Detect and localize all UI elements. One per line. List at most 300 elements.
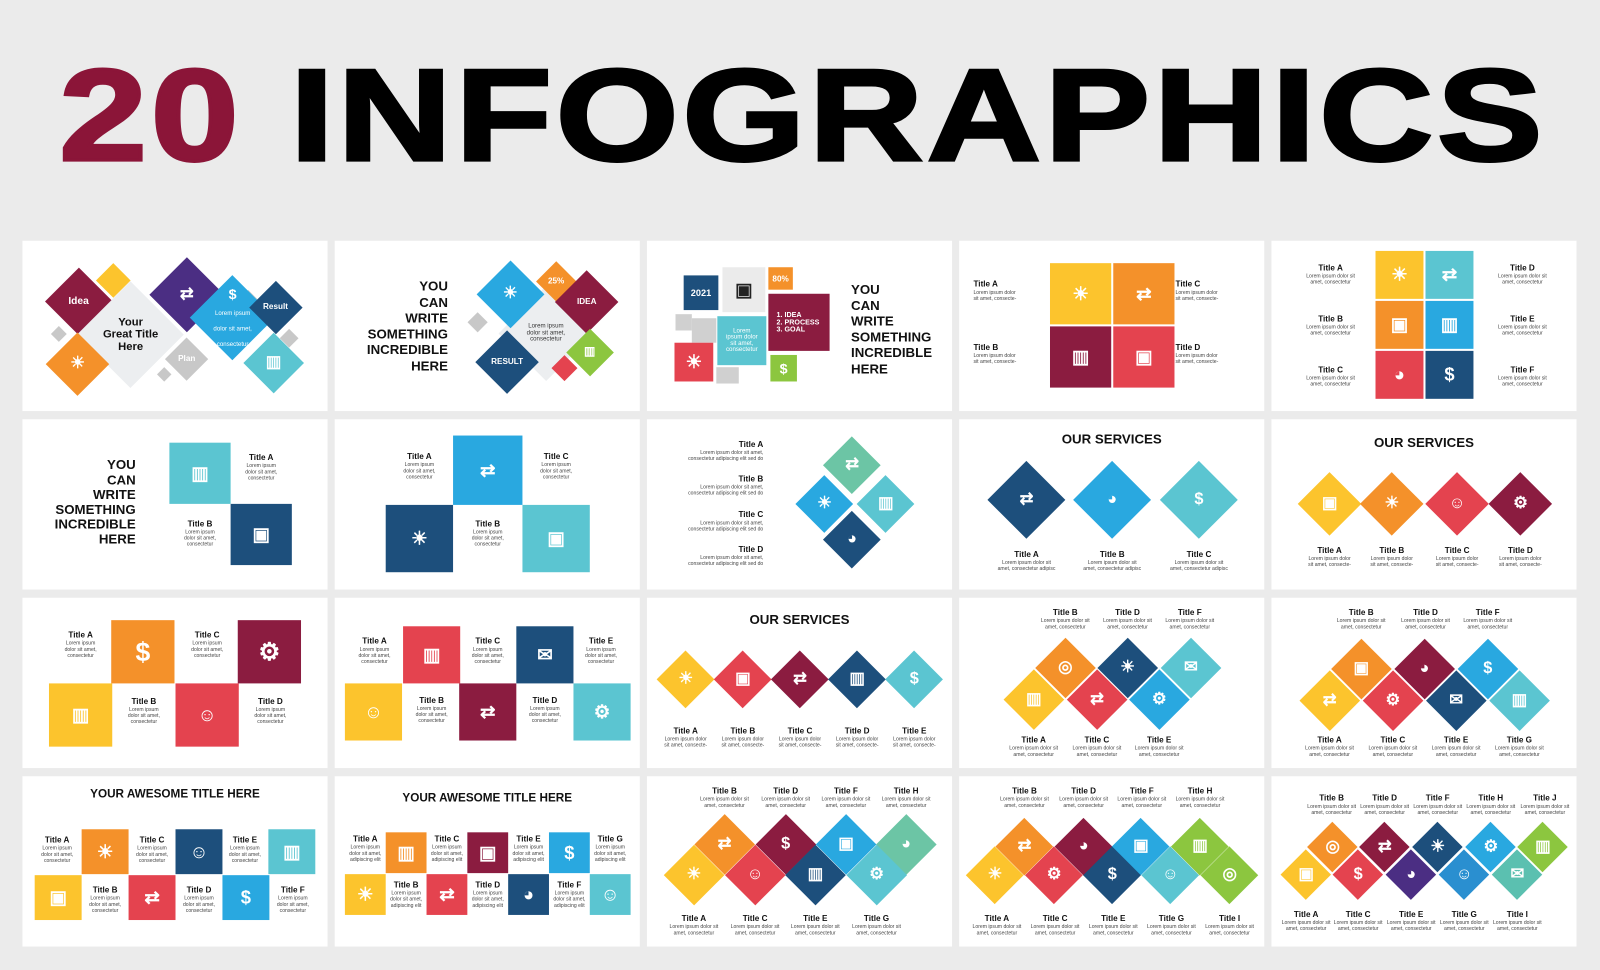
panel 16: awesome title 6 squares: consectetur (92, 908, 118, 914)
panel 4: 2x2 squares: Title A (973, 279, 998, 289)
panel 20: zigzag 10 diamonds: Title G (1452, 910, 1477, 919)
panel 16: awesome title 6 squares: Title E (233, 835, 257, 845)
panel 16: awesome title 6 squares: dolor sit amet, (136, 852, 168, 858)
panel 19: zigzag 9 diamonds: amet, consectetur (1122, 803, 1162, 809)
panel 14: zigzag 6 diamonds: ⚙ (1152, 691, 1166, 708)
panel 3: squares mosaic: ☀ (686, 351, 702, 372)
panel 16: awesome title 6 squares: dolor sit amet, (41, 852, 73, 858)
panel 20: zigzag 10 diamonds: Lorem ipsum dolor sit (1360, 803, 1409, 809)
panel 20: zigzag 10 diamonds: amet, consectetur (1497, 926, 1538, 932)
panel 13: our services 5: Lorem ipsum dolor (665, 736, 707, 742)
panel 12: 5 squares staggered: Lorem ipsum (530, 705, 560, 712)
panel 4: 2x2 squares: ▥ (1072, 346, 1089, 367)
panel 6: text with two squares: Title A (249, 453, 273, 462)
panel 16: awesome title 6 squares: $ (241, 887, 251, 907)
panel 19: zigzag 9 diamonds: Title G (1159, 914, 1184, 923)
panel 8: list with 4 diamonds: consectetur adipiscing elit sed do (688, 490, 763, 497)
panel 13: our services 5: ▣ (735, 670, 751, 688)
panel 20: zigzag 10 diamonds: Lorem ipsum dolor sit (1413, 803, 1462, 809)
panel 1: great title diamonds: ▥ (266, 354, 281, 371)
panel 13: our services 5: sit amet, consecte- (721, 742, 764, 749)
panel 14: zigzag 6 diamonds: Title F (1178, 608, 1202, 617)
panel 17: awesome title 7 squares: Title D (475, 880, 500, 889)
panel 18: zigzag 8 diamonds: ☀ (687, 866, 701, 884)
panel 17: awesome title 7 squares: Lorem ipsum (595, 844, 625, 850)
panel 8: list with 4 diamonds: consectetur adipiscing elit sed do (688, 456, 763, 462)
panel 19: zigzag 9 diamonds: ⇄ (1018, 838, 1031, 855)
panel 16: awesome title 6 squares: Title B (93, 885, 118, 895)
panel 16: awesome title 6 squares: Lorem ipsum (230, 845, 260, 851)
panel 15: zigzag 7 diamonds: amet, consectetur (1405, 624, 1446, 630)
panel 13: our services 5: Title C (788, 726, 812, 735)
panel 9: our services 3: amet, consectetur adipisc (998, 566, 1055, 572)
panel 19: zigzag 9 diamonds: amet, consectetur (1035, 930, 1075, 936)
panel 19: zigzag 9 diamonds: ◎ (1222, 866, 1237, 884)
panel 17: awesome title 7 squares: dolor sit amet, (594, 851, 626, 857)
panel 3: squares mosaic: 2021 (691, 288, 711, 298)
panel 15: zigzag 7 diamonds: amet, consectetur (1309, 752, 1350, 758)
panel 20: zigzag 10 diamonds: Lorem ipsum dolor sit (1466, 803, 1515, 809)
panel 17: awesome title 7 squares: adipiscing elit (432, 857, 462, 863)
panel 10: our services 4: ☺ (1449, 495, 1465, 512)
panel 11: 4 squares staggered: Lorem ipsum (66, 640, 95, 646)
panel 19: zigzag 9 diamonds: Title A (985, 914, 1009, 923)
panel 8: list with 4 diamonds: consectetur adipiscing elit sed do (688, 561, 763, 567)
panel 1: great title diamonds (22, 241, 328, 411)
panel 8: list with 4 diamonds: Title A (739, 440, 763, 449)
panel 18: zigzag 8 diamonds: amet, consectetur (735, 930, 775, 936)
panel 19: zigzag 9 diamonds: ⚙ (1047, 866, 1061, 884)
panel 11: 4 squares staggered: Lorem ipsum (129, 706, 159, 713)
panel 7: three squares: dolor sit amet, (540, 468, 572, 474)
panel 12: 5 squares staggered: Lorem ipsum (586, 646, 616, 652)
panel 7: three squares: Lorem ipsum (473, 529, 502, 535)
panel 3: squares mosaic: SOMETHING (851, 329, 931, 344)
panel 16: awesome title 6 squares: ▣ (49, 887, 67, 907)
panel 15: zigzag 7 diamonds: ✉ (1449, 692, 1463, 709)
panel 16: awesome title 6 squares (22, 776, 328, 947)
panel 4: 2x2 squares: ▣ (1135, 346, 1153, 367)
panel 5: 2x3 squares: ▥ (1441, 314, 1458, 335)
panel 1: great title diamonds: dolor sit amet, (213, 326, 252, 333)
panel 18: zigzag 8 diamonds: ⇄ (718, 836, 731, 853)
panel 16: awesome title 6 squares: consectetur (186, 908, 212, 914)
panel 14: zigzag 6 diamonds: ◎ (1058, 659, 1072, 676)
panel 8: list with 4 diamonds (647, 419, 952, 590)
panel 9: our services 3: Title B (1100, 550, 1125, 559)
panel 7: three squares: Title A (407, 452, 432, 461)
panel 11: 4 squares staggered: Title C (195, 630, 220, 640)
panel 17: awesome title 7 squares (335, 776, 640, 947)
panel 13: our services 5: sit amet, consecte- (893, 742, 936, 749)
panel 5: 2x3 squares: amet, consectetur (1310, 381, 1351, 387)
panel 7: three squares: Title C (544, 452, 569, 461)
panel 12: 5 squares staggered: Lorem ipsum (360, 646, 389, 652)
panel 20: zigzag 10 diamonds: amet, consectetur (1311, 810, 1352, 816)
panel 3: squares mosaic: ipsum dolor (726, 335, 758, 341)
panel 8: list with 4 diamonds: ☀ (817, 495, 832, 512)
panel 6: text with two squares: dolor sit amet, (245, 469, 277, 475)
panel 5: 2x3 squares: Lorem ipsum dolor sit (1498, 375, 1547, 381)
panel 16: awesome title 6 squares: consectetur (44, 858, 70, 864)
panel 20: zigzag 10 diamonds: Title A (1294, 910, 1318, 919)
panel 18: zigzag 8 diamonds: ▣ (838, 836, 854, 853)
panel 19: zigzag 9 diamonds: ▥ (1192, 838, 1208, 855)
title: 20 INFOGRAPHICS (59, 43, 1546, 189)
panel 19: zigzag 9 diamonds: ▣ (1133, 838, 1149, 855)
panel 17: awesome title 7 squares: Title E (516, 834, 541, 844)
panel 7: three squares: Title B (475, 519, 500, 528)
panel 19: zigzag 9 diamonds: Title B (1012, 786, 1037, 796)
panel 6: text with two squares: Lorem ipsum (185, 529, 215, 535)
panel 13: our services 5: Title B (730, 726, 755, 735)
panel 18: zigzag 8 diamonds: amet, consectetur (856, 930, 897, 936)
panel 13: our services 5: sit amet, consecte- (664, 742, 707, 749)
panel 20: zigzag 10 diamonds: amet, consectetur (1444, 926, 1485, 932)
panel 2: you can write diamonds: HERE (411, 358, 448, 373)
panel 16: awesome title 6 squares: Title D (187, 885, 211, 895)
panel 19: zigzag 9 diamonds: Lorem ipsum dolor sit (1059, 796, 1108, 802)
panel 8: list with 4 diamonds: Title B (738, 474, 763, 483)
panel 6: text with two squares: WRITE (93, 487, 136, 502)
panel 18: zigzag 8 diamonds: Title A (682, 914, 706, 923)
panel 4: 2x2 squares: Lorem ipsum dolor (973, 353, 1016, 359)
panel 11: 4 squares staggered: dolor sit amet, (254, 713, 286, 719)
panel 10: our services 4: sit amet, consecte- (1370, 562, 1413, 568)
panel 18: zigzag 8 diamonds: ⚙ (869, 866, 884, 884)
panel 5: 2x3 squares: Title C (1318, 365, 1343, 374)
panel 14: zigzag 6 diamonds: Lorem ipsum dolor sit (1165, 618, 1214, 624)
panel 16: awesome title 6 squares: consectetur (280, 908, 306, 914)
panel 16: awesome title 6 squares: Title F (281, 885, 305, 895)
panel 8: list with 4 diamonds: consectetur adipiscing elit sed do (688, 526, 763, 532)
panel 13: our services 5: Title A (673, 726, 698, 735)
panel 20: zigzag 10 diamonds: $ (1354, 866, 1363, 884)
panel 20: zigzag 10 diamonds: amet, consectetur (1286, 926, 1326, 932)
panel 18: zigzag 8 diamonds: amet, consectetur (886, 803, 926, 809)
panel 17: awesome title 7 squares: ☺ (601, 884, 620, 904)
panel 17: awesome title 7 squares: dolor sit amet, (513, 851, 545, 857)
panel 18: zigzag 8 diamonds: Lorem ipsum dolor sit (822, 796, 870, 802)
panel 4: 2x2 squares: sit amet, consecte- (1176, 296, 1218, 302)
panel 20: zigzag 10 diamonds: amet, consectetur (1338, 926, 1378, 932)
panel 11: 4 squares staggered: ▥ (72, 704, 89, 725)
panel 11: 4 squares staggered (22, 598, 328, 768)
panel 17: awesome title 7 squares: dolor sit amet, (349, 851, 381, 857)
panel 4: 2x2 squares: sit amet, consecte- (973, 359, 1016, 365)
panel 20: zigzag 10 diamonds: Lorem ipsum dolor sit (1387, 920, 1436, 926)
panel 10: our services 4: Lorem ipsum dolor (1371, 555, 1413, 562)
panel 18: zigzag 8 diamonds: Lorem ipsum dolor sit (791, 924, 840, 930)
panel 16: awesome title 6 squares: YOUR AWESOME TITLE HERE (90, 788, 260, 801)
panel 6: text with two squares (22, 419, 328, 590)
panel 3: squares mosaic: 2. PROCESS (777, 319, 819, 326)
panel 2: you can write diamonds: ▥ (584, 344, 596, 358)
panel 5: 2x3 squares: Title E (1510, 314, 1535, 323)
panel 17: awesome title 7 squares: Lorem ipsum (351, 844, 380, 850)
panel 1: great title diamonds: Plan (178, 354, 195, 363)
panel 7: three squares: consectetur (475, 542, 501, 548)
panel 13: our services 5: ▥ (849, 670, 865, 688)
panel 10: our services 4: ☀ (1385, 495, 1399, 512)
panel 6: text with two squares: consectetur (248, 475, 274, 482)
panel 14: zigzag 6 diamonds: Lorem ipsum dolor sit (1135, 745, 1184, 751)
panel 13: our services 5: Lorem ipsum dolor (722, 736, 764, 742)
panel 2: you can write diamonds: Lorem ipsum (528, 323, 564, 330)
panel 17: awesome title 7 squares: Title F (557, 880, 581, 889)
panel 7: three squares: Lorem ipsum (405, 462, 434, 468)
panel 17: awesome title 7 squares: dolor sit amet, (390, 896, 422, 903)
panel 16: awesome title 6 squares: Title C (140, 835, 164, 845)
panel 14: zigzag 6 diamonds: amet, consectetur (1170, 624, 1210, 630)
panel 2: you can write diamonds: 25% (548, 276, 564, 285)
panel 7: three squares (335, 419, 640, 590)
panel 5: 2x3 squares: ⇄ (1442, 264, 1457, 285)
panel 8: list with 4 diamonds: Lorem ipsum dolor sit amet, (700, 554, 763, 561)
panel 20: zigzag 10 diamonds: Title H (1478, 794, 1503, 803)
panel 12: 5 squares staggered: ✉ (537, 644, 553, 665)
panel 3: squares mosaic (647, 241, 952, 411)
panel 12: 5 squares staggered: dolor sit amet, (585, 653, 617, 659)
panel 19: zigzag 9 diamonds: Lorem ipsum dolor sit (1031, 924, 1079, 930)
panel 16: awesome title 6 squares: Title A (45, 835, 69, 845)
panel 3: squares mosaic: INCREDIBLE (851, 345, 932, 360)
panel 20: zigzag 10 diamonds: ▣ (1298, 866, 1314, 884)
panel 3: squares mosaic: ▣ (735, 279, 753, 299)
panel 20: zigzag 10 diamonds: ▥ (1535, 839, 1551, 856)
panel 12: 5 squares staggered: Title B (419, 696, 444, 705)
panel 17: awesome title 7 squares: ▥ (397, 842, 415, 862)
panel 14: zigzag 6 diamonds: ☀ (1120, 659, 1135, 676)
panel 5: 2x3 squares: ☀ (1391, 264, 1408, 285)
panel 17: awesome title 7 squares: Lorem ipsum (473, 890, 502, 896)
panel 10: our services 4: Title C (1445, 546, 1470, 555)
panel 8: list with 4 diamonds: Lorem ipsum dolor sit amet, (700, 520, 763, 526)
panel 18: zigzag 8 diamonds: Title B (712, 786, 737, 796)
panel 11: 4 squares staggered: dolor sit amet, (191, 647, 223, 653)
panel 6: text with two squares: consectetur (187, 542, 213, 548)
panel 5: 2x3 squares: Title D (1510, 263, 1535, 272)
panel 4: 2x2 squares (959, 241, 1264, 411)
panel 1: great title diamonds: Here (118, 341, 143, 353)
panel 15: zigzag 7 diamonds: Title G (1507, 735, 1532, 745)
panel 3: squares mosaic: 1. IDEA (777, 312, 802, 319)
panel 20: zigzag 10 diamonds: ◕ (1406, 866, 1416, 884)
panel 3: squares mosaic: consectetur (726, 347, 758, 353)
panel 13: our services 5 (647, 598, 952, 768)
panel 17: awesome title 7 squares: adipiscing elit (554, 903, 585, 909)
panel 18: zigzag 8 diamonds: amet, consectetur (674, 930, 714, 936)
panel 15: zigzag 7 diamonds: Lorem ipsum dolor sit (1432, 745, 1480, 751)
panel 13: our services 5: Lorem ipsum dolor (836, 736, 878, 742)
panel 15: zigzag 7 diamonds: ⇄ (1323, 692, 1336, 709)
panel 16: awesome title 6 squares: consectetur (139, 858, 165, 864)
panel 6: text with two squares: CAN (107, 472, 136, 487)
panel 10: our services 4: ▣ (1322, 495, 1337, 512)
panel 12: 5 squares staggered: ☺ (364, 701, 383, 722)
panel 3: squares mosaic: $ (780, 360, 788, 376)
panel 19: zigzag 9 diamonds: Lorem ipsum dolor sit (1176, 796, 1224, 802)
panel 20: zigzag 10 diamonds: Lorem ipsum dolor sit (1493, 920, 1542, 926)
panel 15: zigzag 7 diamonds: Title B (1349, 608, 1374, 617)
panel 14: zigzag 6 diamonds: Title D (1115, 608, 1140, 617)
panel 17: awesome title 7 squares: adipiscing elit (595, 857, 626, 863)
panel 11: 4 squares staggered: dolor sit amet, (65, 647, 97, 653)
panel 15: zigzag 7 diamonds: ⚙ (1386, 692, 1400, 709)
panel 7: three squares: ⇄ (480, 460, 495, 480)
panel 20: zigzag 10 diamonds: Lorem ipsum dolor sit (1520, 803, 1569, 809)
panel 14: zigzag 6 diamonds: ✉ (1184, 659, 1198, 676)
panel 18: zigzag 8 diamonds (647, 776, 952, 947)
panel 17: awesome title 7 squares: Title B (394, 880, 419, 889)
panel 14: zigzag 6 diamonds: Lorem ipsum dolor sit (1009, 745, 1058, 751)
panel 16: awesome title 6 squares: dolor sit amet, (89, 902, 121, 908)
panel 18: zigzag 8 diamonds: Lorem ipsum dolor sit (669, 924, 718, 930)
panel 17: awesome title 7 squares: ⇄ (439, 884, 455, 904)
panel 12: 5 squares staggered: Title A (362, 636, 387, 646)
panel 3: squares mosaic: WRITE (851, 313, 894, 328)
panel 1: great title diamonds: Idea (68, 295, 89, 307)
panel 15: zigzag 7 diamonds: amet, consectetur (1467, 624, 1508, 630)
panel 15: zigzag 7 diamonds: ▣ (1353, 660, 1369, 677)
panel 9: our services 3: ⇄ (1020, 491, 1033, 508)
panel 17: awesome title 7 squares: Title A (353, 834, 378, 844)
panel 12: 5 squares staggered: Title E (589, 636, 613, 646)
panel 14: zigzag 6 diamonds: amet, consectetur (1107, 624, 1148, 630)
panel 12: 5 squares staggered: Title D (532, 696, 557, 705)
panel 19: zigzag 9 diamonds: amet, consectetur (1093, 930, 1134, 936)
panel 9: our services 3: ◕ (1107, 491, 1117, 508)
panel 14: zigzag 6 diamonds: Title C (1085, 735, 1109, 745)
panel 2: you can write diamonds: RESULT (491, 357, 523, 366)
panel 1: great title diamonds: Result (263, 302, 288, 311)
panel 19: zigzag 9 diamonds: Lorem ipsum dolor sit (1117, 796, 1166, 802)
panel 12: 5 squares staggered: Lorem ipsum (473, 646, 502, 652)
panel 8: list with 4 diamonds: Lorem ipsum dolor sit amet, (700, 449, 763, 456)
panel 2: you can write diamonds: YOU (419, 278, 448, 294)
panel 16: awesome title 6 squares: consectetur (232, 858, 258, 864)
panel 1: great title diamonds: Your (118, 316, 143, 328)
panel 8: list with 4 diamonds: ⇄ (845, 456, 859, 473)
panel 14: zigzag 6 diamonds: Lorem ipsum dolor sit (1103, 618, 1152, 624)
panel 16: awesome title 6 squares: Lorem ipsum (42, 845, 72, 851)
panel 7: three squares: dolor sit amet, (403, 468, 435, 474)
panel 8: list with 4 diamonds: Lorem ipsum dolor sit amet, (700, 484, 763, 490)
panel 16: awesome title 6 squares: dolor sit amet, (229, 852, 261, 858)
panel 17: awesome title 7 squares: Lorem ipsum (514, 844, 543, 850)
panel 17: awesome title 7 squares: Lorem ipsum (432, 844, 462, 850)
panel 18: zigzag 8 diamonds: Lorem ipsum dolor sit (852, 924, 901, 930)
panel 15: zigzag 7 diamonds: amet, consectetur (1436, 752, 1476, 758)
panel 9: our services 3: Title A (1014, 550, 1039, 559)
panel 19: zigzag 9 diamonds: amet, consectetur (977, 930, 1017, 936)
panel 1: great title diamonds: ☀ (70, 355, 85, 373)
panel 11: 4 squares staggered: dolor sit amet, (128, 713, 160, 719)
panel 17: awesome title 7 squares: YOUR AWESOME TITLE HERE (402, 793, 572, 805)
panel 19: zigzag 9 diamonds: ☀ (988, 866, 1002, 884)
panel 15: zigzag 7 diamonds: ▥ (1512, 692, 1527, 709)
panel 9: our services 3: amet, consectetur adipisc (1083, 566, 1141, 572)
panel 19: zigzag 9 diamonds: Title D (1071, 786, 1096, 796)
panel 11: 4 squares staggered: consectetur (131, 719, 157, 725)
panel 18: zigzag 8 diamonds: Lorem ipsum dolor sit (882, 796, 930, 802)
panel 14: zigzag 6 diamonds: ▥ (1026, 691, 1041, 708)
panel 18: zigzag 8 diamonds: amet, consectetur (826, 803, 866, 809)
panel 14: zigzag 6 diamonds: Title A (1021, 735, 1046, 745)
panel 5: 2x3 squares: $ (1444, 364, 1455, 385)
panel 19: zigzag 9 diamonds: Lorem ipsum dolor sit (1000, 796, 1049, 802)
panel 19: zigzag 9 diamonds: Title F (1130, 786, 1154, 796)
panel 20: zigzag 10 diamonds: Lorem ipsum dolor sit (1440, 920, 1489, 926)
panel 12: 5 squares staggered: dolor sit amet, (472, 653, 504, 659)
panel 13: our services 5: sit amet, consecte- (836, 742, 879, 749)
panel 5: 2x3 squares: amet, consectetur (1502, 330, 1543, 336)
panel 9: our services 3: OUR SERVICES (1062, 431, 1162, 447)
panel 4: 2x2 squares: sit amet, consecte- (973, 296, 1016, 302)
panel 15: zigzag 7 diamonds: Lorem ipsum dolor sit (1463, 618, 1512, 624)
panel 15: zigzag 7 diamonds: Title C (1380, 735, 1405, 745)
panel 14: zigzag 6 diamonds: amet, consectetur (1013, 752, 1054, 758)
panel 13: our services 5: Title E (902, 726, 926, 735)
panel 20: zigzag 10 diamonds: Title D (1372, 794, 1397, 803)
panel 2: you can write diamonds: dolor sit amet, (527, 330, 565, 336)
panel 18: zigzag 8 diamonds: Title G (864, 914, 889, 923)
panel 16: awesome title 6 squares: ☀ (97, 841, 113, 861)
panel 4: 2x2 squares: Title C (1176, 279, 1200, 289)
panel 12: 5 squares staggered: dolor sit amet, (358, 653, 391, 659)
panel 5: 2x3 squares: Lorem ipsum dolor sit (1306, 273, 1355, 279)
panel 8: list with 4 diamonds: ▥ (878, 495, 893, 512)
panel 19: zigzag 9 diamonds: amet, consectetur (1063, 803, 1104, 809)
panel 18: zigzag 8 diamonds: ▥ (808, 866, 823, 884)
panel 4: 2x2 squares: Lorem ipsum dolor (1176, 353, 1218, 359)
panel 3: squares mosaic: Lorem (733, 328, 751, 335)
panel 4: 2x2 squares: Lorem ipsum dolor (1176, 289, 1218, 295)
panel 8: list with 4 diamonds: Title C (738, 510, 763, 519)
panel 18: zigzag 8 diamonds: ◕ (901, 836, 911, 853)
panel 20: zigzag 10 diamonds: ⚙ (1483, 839, 1498, 856)
panel 2: you can write diamonds: CAN (419, 294, 448, 310)
panel 16: awesome title 6 squares: dolor sit amet, (183, 902, 215, 908)
panel 12: 5 squares staggered: consectetur (588, 659, 614, 665)
panel 6: text with two squares: ▥ (191, 463, 209, 483)
panel 14: zigzag 6 diamonds: amet, consectetur (1045, 624, 1086, 630)
panel 13: our services 5: ☀ (678, 670, 693, 688)
panel 5: 2x3 squares: amet, consectetur (1502, 381, 1543, 387)
panel 19: zigzag 9 diamonds: ☺ (1162, 866, 1179, 884)
panel 10: our services 4: sit amet, consecte- (1308, 562, 1351, 568)
panel 19: zigzag 9 diamonds: Title I (1219, 914, 1240, 923)
panel 5: 2x3 squares: amet, consectetur (1310, 279, 1351, 285)
panel 2: you can write diamonds: SOMETHING (368, 326, 448, 341)
panel 12: 5 squares staggered: consectetur (475, 659, 501, 665)
panel 6: text with two squares: Title B (188, 519, 212, 528)
panel 12: 5 squares staggered: ⇄ (480, 701, 495, 722)
panel 19: zigzag 9 diamonds: Lorem ipsum dolor sit (1089, 924, 1138, 930)
panel 10: our services 4: ⚙ (1513, 495, 1528, 512)
panel 15: zigzag 7 diamonds: Title A (1317, 735, 1342, 745)
panel 8: list with 4 diamonds: Title D (738, 545, 763, 554)
panel 15: zigzag 7 diamonds (1271, 598, 1577, 768)
panel 1: great title diamonds: Great Title (103, 328, 158, 341)
panel 3: squares mosaic: 3. GOAL (777, 326, 805, 333)
panel 17: awesome title 7 squares: adipiscing elit (391, 903, 421, 909)
panel 4: 2x2 squares: ⇄ (1136, 283, 1152, 303)
panel 13: our services 5: Title D (845, 726, 870, 735)
panel 18: zigzag 8 diamonds: Title F (834, 786, 858, 796)
panel 15: zigzag 7 diamonds: Lorem ipsum dolor sit (1368, 745, 1417, 751)
panel 12: 5 squares staggered: dolor sit amet, (529, 712, 561, 718)
